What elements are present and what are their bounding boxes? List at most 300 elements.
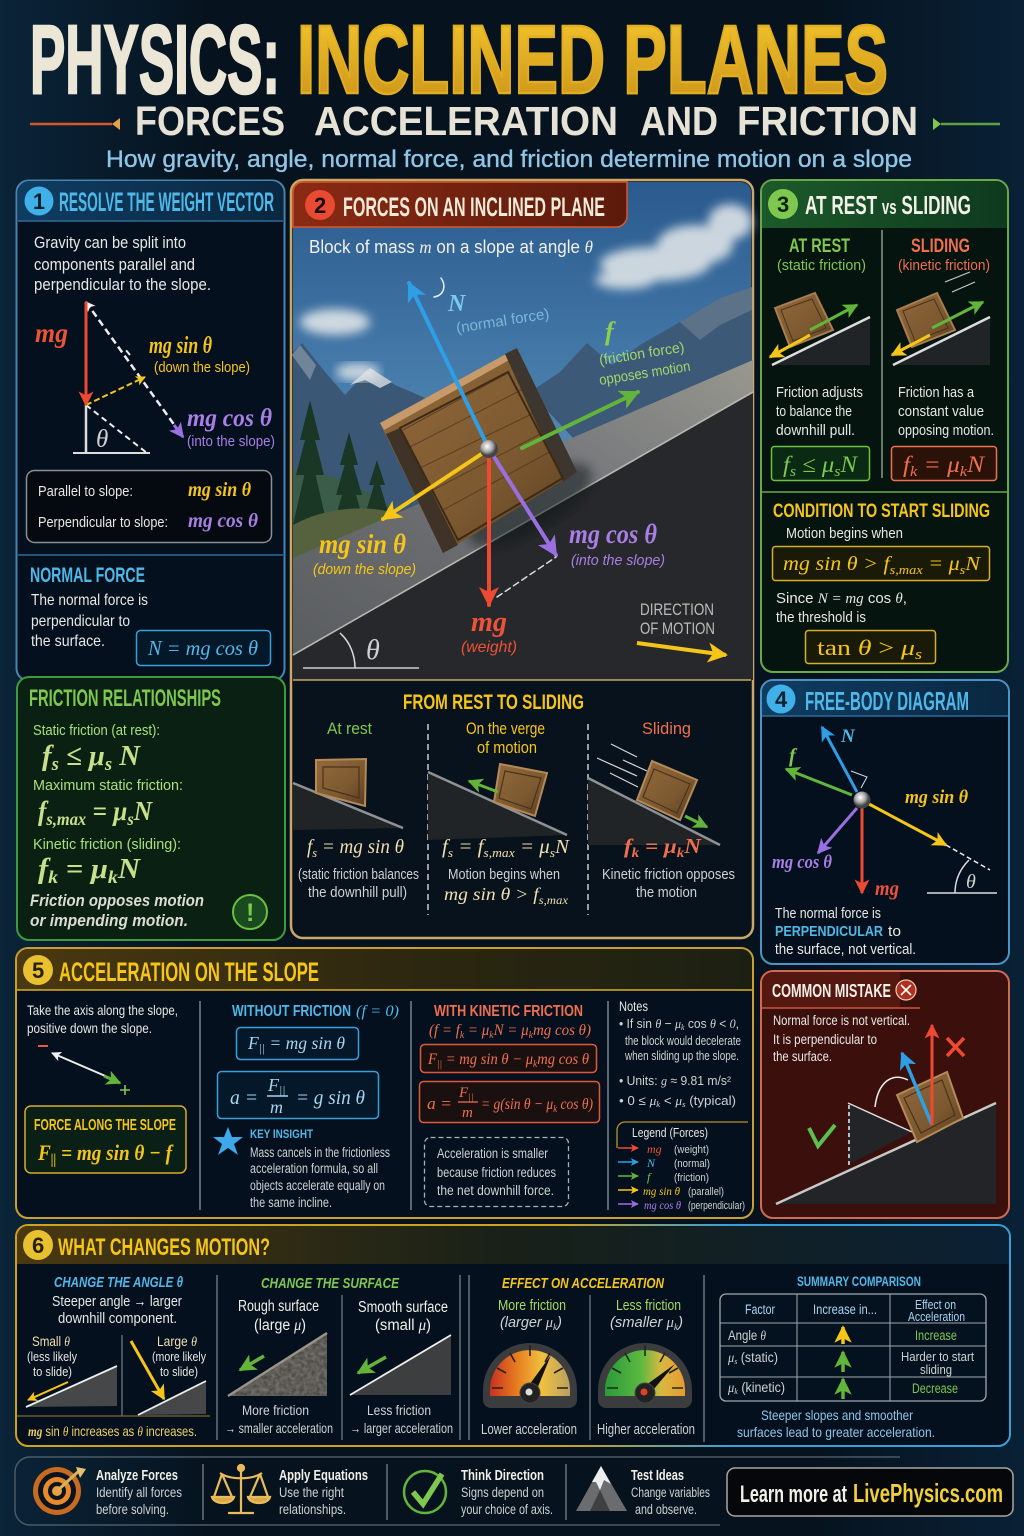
crate <box>380 348 604 563</box>
condition to start sliding: the threshold is <box>776 609 866 626</box>
summary comparison table: surfaces lead to greater acceleration. <box>737 1424 935 1440</box>
maximum static friction: s,max <box>45 809 86 829</box>
labels: mg sin θ <box>149 333 212 359</box>
column: with kinetic friction: k <box>529 1030 533 1041</box>
column: change the angle <box>17 1274 210 1440</box>
column: sliding <box>892 236 996 480</box>
column: change the angle: mg sin θ increases as θ increases. <box>28 1423 197 1440</box>
summary comparison table: Harder to start <box>901 1349 974 1364</box>
stage: sliding: Kinetic friction opposes <box>602 866 735 883</box>
condition to start sliding: Motion begins when <box>786 525 903 542</box>
column: effect on acceleration: Lower acceleration <box>481 1422 577 1438</box>
scene: sky and mountains <box>292 182 752 680</box>
condition to start sliding <box>772 501 990 664</box>
notes: k <box>681 1022 685 1032</box>
normal force section <box>30 564 270 666</box>
tip: apply equations: relationships. <box>279 1502 346 1517</box>
legend: Legend (Forces) <box>632 1125 708 1140</box>
labels <box>35 318 275 450</box>
column: change the angle: downhill component. <box>58 1310 177 1327</box>
subtitle: AND <box>640 98 718 144</box>
heading: COMMON MISTAKE <box>772 981 891 1001</box>
badge 4 <box>766 684 796 714</box>
tip: analyze forces: before solving. <box>96 1502 169 1517</box>
tip: test ideas: and observe. <box>635 1502 697 1517</box>
legend: f <box>647 1170 652 1184</box>
key insight: objects accelerate equally on <box>250 1178 385 1193</box>
column: effect on acceleration: Less friction <box>616 1298 681 1314</box>
column: change the surface: → smaller acceleration <box>225 1420 333 1436</box>
stage: sliding: = μ <box>639 834 677 858</box>
icon: scales <box>212 1465 270 1513</box>
stage: on the verge: = f <box>453 836 486 858</box>
panel 3: at rest vs sliding <box>761 180 1008 672</box>
summary comparison table: Acceleration <box>908 1310 965 1324</box>
key insight: Mass cancels in the frictionless <box>250 1145 390 1160</box>
column: with kinetic friction: k <box>533 1059 538 1070</box>
stage: on the verge: s,max <box>539 894 569 907</box>
vector labels <box>772 726 976 900</box>
column: with kinetic friction: k <box>460 1030 465 1041</box>
vector labels: θ <box>966 871 976 893</box>
summary comparison table: (static) <box>737 1350 778 1365</box>
force labels: mg sin θ <box>319 529 406 559</box>
badge 3 <box>768 189 798 219</box>
dashed note: Acceleration is smaller <box>437 1146 548 1161</box>
title <box>30 5 888 114</box>
badge 4: 4 <box>775 687 788 712</box>
icon: exclamation <box>233 895 267 929</box>
notes: μ <box>674 1093 683 1108</box>
weight vector diagram <box>73 302 183 453</box>
explanation: the surface. <box>773 1049 832 1064</box>
column: at rest: s <box>834 464 841 480</box>
column: without friction: || <box>259 1042 265 1055</box>
panel 4: free-body diagram <box>761 680 1009 964</box>
column: change the surface: (large μ) <box>254 1317 306 1334</box>
stage: sliding: k <box>632 845 639 860</box>
column: change the surface: Less friction <box>367 1402 431 1418</box>
column: sliding: Friction has a <box>898 384 975 401</box>
column: at rest: AT REST <box>789 236 850 257</box>
notes: s <box>682 1099 686 1109</box>
tip: think direction: your choice of axis. <box>461 1502 553 1517</box>
column: with kinetic friction: N = μ <box>493 1022 529 1039</box>
column: change the angle: to slide) <box>160 1364 198 1379</box>
key insight: acceleration formula, so all <box>250 1161 378 1176</box>
column: at rest: to balance the <box>776 403 852 420</box>
column: effect on acceleration: ) <box>676 1315 683 1331</box>
stage: at rest: f <box>307 836 313 858</box>
force labels: mg cos θ <box>569 519 657 549</box>
maximum static friction: s <box>126 809 134 829</box>
panel 6: what changes motion <box>16 1225 1010 1446</box>
tip: think direction: Signs depend on <box>461 1485 544 1500</box>
component summary box: mg cos θ <box>188 510 259 532</box>
static friction <box>33 722 160 775</box>
normal force section: NORMAL FORCE <box>30 564 145 587</box>
column: with kinetic friction: = mg sin θ − μ <box>442 1051 533 1068</box>
summary comparison table: Angle θ <box>728 1328 766 1343</box>
column: with kinetic friction: F <box>459 1085 468 1101</box>
kinetic friction: = μ <box>58 854 108 885</box>
column: with kinetic friction: F <box>428 1051 437 1068</box>
column: effect on acceleration: k <box>674 1323 679 1333</box>
normal force section: perpendicular to <box>31 613 130 630</box>
summary comparison table: μ <box>727 1380 734 1395</box>
column: without friction: m <box>270 1097 283 1117</box>
free-body vectors <box>786 727 997 893</box>
static friction: ≤ μ <box>59 740 105 772</box>
column: at rest: Friction adjusts <box>776 384 863 401</box>
stage: at rest: the downhill pull) <box>308 884 407 901</box>
caption: the surface, not vertical. <box>775 942 916 958</box>
static friction: s <box>51 754 59 775</box>
legend: N <box>646 1156 656 1170</box>
legend: (perpendicular) <box>688 1200 745 1212</box>
notes: θ < 0, <box>710 1016 739 1031</box>
key insight <box>213 1127 390 1210</box>
column: with kinetic friction: (f = f <box>429 1022 461 1039</box>
column: change the surface: → larger acceleration <box>350 1420 453 1436</box>
badge 1: 1 <box>33 189 45 214</box>
condition to start sliding: s,max <box>890 562 923 577</box>
stage: on the verge: of motion <box>477 738 537 757</box>
column: with kinetic friction: cos θ) <box>557 1096 593 1113</box>
column: with kinetic friction: || <box>437 1059 442 1070</box>
maximum static friction: = μ <box>86 796 127 826</box>
tip: test ideas: Change variables <box>631 1485 710 1500</box>
kinetic friction: f <box>38 854 47 885</box>
stage: sliding: k <box>677 845 684 860</box>
force labels: N <box>447 291 467 317</box>
column: with kinetic friction: m <box>462 1105 473 1121</box>
call to action: Learn more at <box>740 1481 847 1508</box>
column: change the angle: Small θ <box>32 1333 70 1350</box>
summary comparison table: Decrease <box>912 1381 958 1396</box>
component summary box: Parallel to slope: <box>38 483 133 500</box>
note <box>30 891 204 930</box>
force along the slope box: || <box>51 1152 56 1168</box>
angle marker: θ <box>366 635 380 666</box>
column: change the angle: CHANGE THE ANGLE θ <box>54 1274 183 1291</box>
column: effect on acceleration: ) <box>555 1315 562 1331</box>
gauge: higher acceleration <box>598 1343 692 1408</box>
condition to start sliding: tan θ > μ <box>817 635 912 660</box>
tip: test ideas: Test Ideas <box>631 1468 684 1484</box>
subtitle: FORCES <box>135 98 285 144</box>
stage: at rest: s <box>312 845 317 860</box>
notes: (typical) <box>686 1093 736 1108</box>
heading: AT REST vs SLIDING <box>805 190 971 220</box>
force labels <box>313 291 691 656</box>
column: change the angle: Large θ <box>157 1333 197 1350</box>
column: change the angle: (more likely <box>152 1349 206 1364</box>
column: without friction: = g sin θ <box>296 1087 365 1109</box>
stage: sliding: f <box>624 834 631 858</box>
force labels: (into the slope) <box>571 552 665 569</box>
column: change the surface: More friction <box>242 1402 309 1418</box>
column: with kinetic friction: || <box>468 1092 474 1103</box>
condition to start sliding: s <box>915 647 923 663</box>
badge 3: 3 <box>777 192 789 217</box>
notes: • Units: g ≈ 9.81 m/s² <box>619 1073 732 1088</box>
component summary box: mg sin θ <box>188 479 252 501</box>
column: change the surface: CHANGE THE SURFACE <box>261 1275 400 1292</box>
legend: mg cos θ <box>644 1200 681 1212</box>
icon: mountain <box>576 1466 627 1511</box>
labels: (into the slope) <box>187 433 275 450</box>
note: or impending motion. <box>30 911 188 930</box>
summary comparison table: Factor <box>745 1302 775 1317</box>
stage: on the verge: s <box>448 845 453 860</box>
static friction: f <box>42 740 52 772</box>
force labels: (friction force) <box>598 340 686 369</box>
direction of motion <box>637 600 726 655</box>
maximum static friction: f <box>38 796 47 826</box>
column: at rest <box>770 236 870 480</box>
direction of motion: DIRECTION <box>640 600 714 619</box>
tip: think direction: Think Direction <box>461 1468 544 1484</box>
notes: • 0 ≤ μ <box>619 1093 656 1108</box>
panel 2 header: Block of mass m on a slope at angle θ <box>309 237 593 257</box>
column: with kinetic friction: a = <box>427 1094 452 1113</box>
notes <box>619 999 741 1109</box>
from rest to sliding heading: FROM REST TO SLIDING <box>403 691 584 714</box>
notes: Notes <box>619 999 648 1014</box>
subtitle: FRICTION <box>737 98 918 144</box>
icon: target <box>33 1467 86 1515</box>
heading: WHAT CHANGES MOTION? <box>58 1234 270 1261</box>
stage: at rest <box>293 719 419 901</box>
stage: sliding: N <box>683 834 702 858</box>
badge 6: 6 <box>32 1233 44 1258</box>
badge 6 <box>23 1230 53 1260</box>
notes: cos <box>685 1016 710 1031</box>
weight vector diagram: θ <box>96 426 108 453</box>
key insight: the same incline. <box>250 1195 332 1210</box>
caption: to <box>888 924 901 940</box>
vector labels: mg <box>875 876 899 900</box>
column: change the angle: (less likely <box>27 1349 77 1364</box>
tip: analyze forces: Identify all forces <box>96 1485 182 1500</box>
panel: common mistake <box>761 971 1009 1218</box>
summary comparison table: s <box>734 1356 738 1366</box>
force along the slope box: FORCE ALONG THE SLOPE <box>34 1117 176 1134</box>
legend: (friction) <box>674 1172 709 1184</box>
stage: on the verge: f <box>442 836 448 858</box>
column: sliding: (kinetic friction) <box>898 257 990 274</box>
gauge: lower acceleration <box>483 1343 577 1408</box>
vector labels: mg cos θ <box>772 852 832 873</box>
dashed note <box>424 1138 568 1206</box>
subtitle <box>30 98 1000 144</box>
summary comparison table: μ <box>727 1350 734 1365</box>
stage: on the verge: = μ <box>515 836 550 858</box>
legend: (normal) <box>674 1158 710 1170</box>
stage: at rest: (static friction balances <box>298 866 419 883</box>
legend: mg sin θ <box>643 1186 680 1198</box>
condition to start sliding: = μ <box>923 553 960 575</box>
component summary box <box>26 470 272 542</box>
column: sliding: N <box>966 452 986 477</box>
dashed note: because friction reduces <box>437 1165 556 1180</box>
tip: apply equations: Use the right <box>279 1485 344 1500</box>
intro text: components parallel and <box>34 255 195 274</box>
static friction: N <box>112 740 141 772</box>
column: sliding: f <box>903 452 909 477</box>
panel 1: resolve the weight vector <box>16 180 284 680</box>
column: at rest: s <box>790 464 796 480</box>
title: PHYSICS: <box>30 5 280 114</box>
column: effect on acceleration: k <box>553 1323 558 1333</box>
caption: The normal force is <box>775 906 881 922</box>
tagline: How gravity, angle, normal force, and friction determine motion on a slope <box>106 146 912 173</box>
notes: k <box>656 1099 660 1109</box>
summary comparison table: sliding <box>920 1362 952 1377</box>
column: change the surface: Smooth surface <box>358 1299 448 1316</box>
summary comparison table: (kinetic) <box>738 1380 785 1395</box>
stage: sliding: the motion <box>636 884 697 901</box>
explanation: It is perpendicular to <box>773 1032 877 1047</box>
column: with kinetic friction <box>420 1003 600 1122</box>
tip: apply equations <box>279 1468 368 1517</box>
force labels: (weight) <box>461 639 517 656</box>
labels: mg cos θ <box>187 405 272 432</box>
column: sliding: constant value <box>898 403 984 420</box>
condition to start sliding: Since N = mg cos θ, <box>776 590 907 607</box>
labels: mg <box>35 318 68 348</box>
column: at rest: f <box>783 452 789 477</box>
notes: the block would decelerate <box>625 1033 741 1048</box>
panel 2 header: 2 <box>314 193 326 218</box>
caption: PERPENDICULAR <box>775 923 883 940</box>
column: without friction: F <box>248 1033 259 1053</box>
column: sliding: SLIDING <box>911 236 970 257</box>
summary comparison table: Increase in... <box>813 1302 877 1317</box>
notes: • If sin θ − μ <box>619 1016 682 1031</box>
condition to start sliding: mg sin θ > f <box>783 553 880 575</box>
force labels: (down the slope) <box>313 561 416 578</box>
column: at rest: (static friction) <box>777 257 866 274</box>
caption <box>775 906 916 958</box>
tip: test ideas <box>631 1468 710 1517</box>
labels: (down the slope) <box>154 359 250 376</box>
column: without friction <box>218 1003 399 1118</box>
kinetic friction: Kinetic friction (sliding): <box>33 836 181 853</box>
column: sliding: k <box>910 464 918 480</box>
column: with kinetic friction: WITH KINETIC FRICTION <box>434 1003 583 1020</box>
call to action <box>727 1468 1013 1516</box>
stage: on the verge: s <box>550 845 555 860</box>
note: Friction opposes motion <box>30 891 204 910</box>
summary comparison table: Increase <box>915 1328 957 1343</box>
angle marker <box>303 633 419 668</box>
badge 5 <box>23 955 53 985</box>
force along the slope box <box>25 1106 186 1173</box>
stage: on the verge: mg sin θ > f <box>444 884 531 904</box>
tip: analyze forces: Analyze Forces <box>96 1468 178 1484</box>
panel 5: acceleration on the slope <box>16 948 753 1218</box>
axis setup: Take the axis along the slope, <box>27 1002 178 1018</box>
legend <box>617 1122 748 1212</box>
column: without friction: (f = 0) <box>356 1003 399 1020</box>
direction of motion: OF MOTION <box>640 619 715 638</box>
intro text <box>34 233 211 294</box>
column: change the surface <box>225 1275 453 1440</box>
normal force section: The normal force is <box>31 592 148 609</box>
summary comparison table: SUMMARY COMPARISON <box>797 1273 921 1289</box>
column: at rest: downhill pull. <box>776 422 855 439</box>
column: change the surface: Rough surface <box>238 1298 319 1315</box>
icon: cross badge <box>896 980 916 1000</box>
column: with kinetic friction: = g(sin θ − μ <box>481 1096 566 1113</box>
column: sliding: opposing motion. <box>898 422 994 439</box>
kinetic friction <box>33 836 181 887</box>
intro text: Gravity can be split into <box>34 233 186 252</box>
column: effect on acceleration: EFFECT ON ACCELERATION <box>502 1275 665 1292</box>
intro text: perpendicular to the slope. <box>34 275 211 294</box>
heading: ACCELERATION ON THE SLOPE <box>59 957 319 987</box>
panel 2 header <box>293 182 627 257</box>
vector labels: mg sin θ <box>905 787 968 808</box>
column: sliding: k <box>960 464 968 480</box>
kinetic friction: N <box>117 854 142 885</box>
badge 5: 5 <box>32 958 44 983</box>
kinetic friction: k <box>48 867 58 887</box>
stage: at rest: = mg sin θ <box>317 836 404 858</box>
column: without friction: WITHOUT FRICTION <box>232 1003 351 1020</box>
icon: exclamation: ! <box>246 899 254 927</box>
force labels: f <box>605 317 616 346</box>
tip: think direction <box>461 1468 553 1517</box>
slope <box>293 360 753 680</box>
vector labels: f <box>789 745 798 767</box>
tip: analyze forces <box>96 1468 182 1517</box>
heading: FRICTION RELATIONSHIPS <box>29 685 221 712</box>
legend: (parallel) <box>688 1186 724 1198</box>
explanation <box>773 1013 910 1064</box>
maximum static friction: N <box>133 796 153 826</box>
column: without friction: || <box>279 1084 285 1097</box>
legend: mg <box>647 1142 662 1156</box>
column: at rest: N <box>839 452 859 477</box>
static friction: s <box>104 754 112 775</box>
column: change the angle: Steeper angle → larger <box>52 1293 182 1310</box>
force along the slope box: F <box>38 1140 53 1165</box>
column: with kinetic friction: mg cos θ <box>537 1051 589 1068</box>
column: effect on acceleration: More friction <box>498 1298 566 1314</box>
mistake illustration <box>776 1025 996 1204</box>
summary comparison table: Effect on <box>915 1298 956 1312</box>
normal force section: N = mg cos θ <box>147 636 258 660</box>
column: effect on acceleration: Higher acceleration <box>597 1422 695 1438</box>
axis setup: positive down the slope. <box>27 1020 152 1036</box>
summary comparison table <box>720 1273 986 1440</box>
key insight: KEY INSIGHT <box>250 1127 314 1141</box>
force arrows <box>383 278 638 605</box>
column: change the angle: to slide) <box>33 1364 72 1379</box>
badge 1 <box>24 186 54 216</box>
column: at rest: ≤ μ <box>796 452 834 477</box>
tip: apply equations: Apply Equations <box>279 1468 368 1484</box>
notes: < <box>660 1093 675 1108</box>
column: sliding: = μ <box>917 452 960 477</box>
normal force section: the surface. <box>31 633 105 650</box>
panel: friction relationships <box>17 677 285 940</box>
axis setup <box>27 1002 178 1095</box>
force labels: opposes motion <box>598 359 691 389</box>
